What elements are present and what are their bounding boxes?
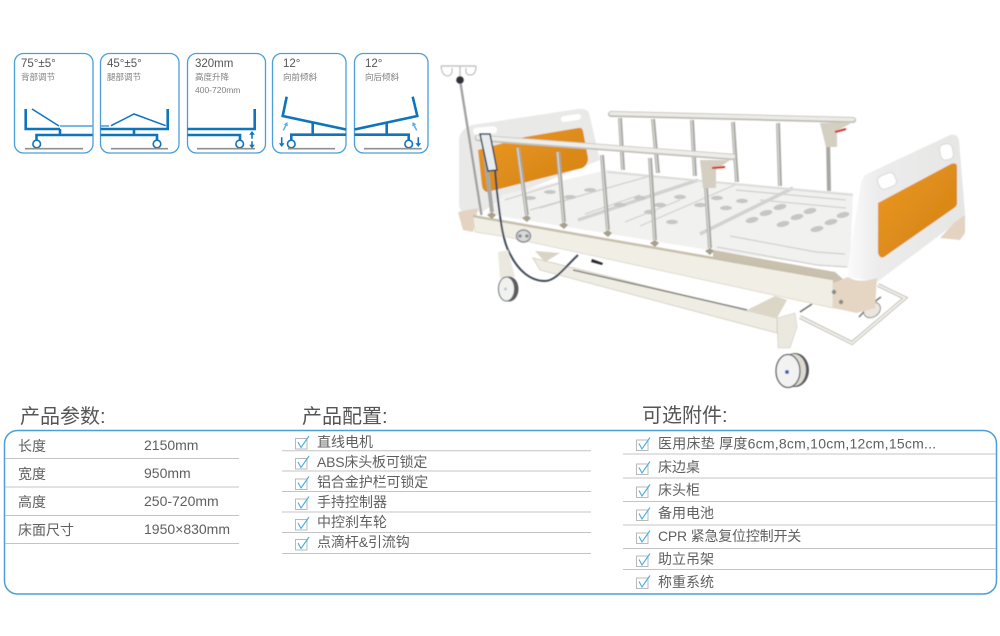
far headboard bbox=[458, 109, 600, 232]
icon card: leg adjustment 45°: 腿部调节 bbox=[107, 72, 142, 82]
mattress deck bbox=[487, 170, 853, 268]
item: ABS headboard: ABS床头板可锁定 bbox=[317, 454, 427, 470]
foot pedal frame bbox=[800, 285, 905, 343]
heading: product parameters: 产品参数: bbox=[20, 405, 106, 428]
icon card: tilt forward 12°: 向前倾斜 bbox=[283, 72, 318, 82]
icon card: leg adjustment 45°: 45°±5° bbox=[107, 58, 142, 70]
hand controller with cable bbox=[480, 134, 578, 281]
icon card: back adjustment 75°: 背部调节 bbox=[21, 72, 56, 82]
item: IV pole and drain hook: 点滴杆&引流钩 bbox=[317, 534, 410, 550]
accessories list bbox=[623, 436, 996, 590]
row: length: 2150mm bbox=[144, 437, 198, 453]
item: weighing system: 称重系统 bbox=[658, 574, 714, 590]
icon card: tilt backward 12°: 向后倾斜 bbox=[365, 72, 400, 82]
row: height: 250-720mm bbox=[144, 493, 219, 509]
rounded panel outline bbox=[4, 430, 996, 594]
item: overbed table: 床边桌 bbox=[658, 459, 700, 475]
item: mattress: 医用床垫 厚度6cm,8cm,10cm,12cm,15cm... bbox=[658, 436, 936, 452]
icon card: tilt forward 12°: 12° bbox=[283, 58, 300, 70]
row: width bbox=[18, 465, 191, 482]
row: width: 950mm bbox=[144, 465, 191, 481]
item: central brake: 中控刹车轮 bbox=[317, 514, 387, 530]
item: bedside cabinet: 床头柜 bbox=[658, 482, 700, 498]
near side rail bbox=[478, 138, 733, 255]
heading: product configuration: 产品配置: bbox=[302, 405, 388, 428]
row: deck size: 床面尺寸 bbox=[18, 522, 74, 538]
icon card: tilt forward 12° bbox=[272, 54, 346, 153]
near headboard bbox=[848, 135, 965, 282]
item: aluminium rail: 铝合金护栏可锁定 bbox=[317, 474, 428, 490]
item: overbed table bbox=[636, 459, 700, 475]
icon card: back adjustment 75° bbox=[14, 54, 93, 153]
parameters table bbox=[5, 437, 239, 544]
row: length: 长度 bbox=[18, 438, 46, 454]
icon card: back adjustment 75°: 75°±5° bbox=[21, 58, 56, 70]
icon card: tilt backward 12°: 12° bbox=[365, 58, 382, 70]
row: length bbox=[18, 437, 198, 454]
product image: electric hospital bed bbox=[441, 66, 965, 388]
heading: optional accessories: 可选附件: bbox=[642, 404, 728, 427]
icon card: leg adjustment 45° bbox=[100, 54, 179, 153]
icon card: height 320mm bbox=[188, 54, 266, 153]
row: deck size: 1950×830mm bbox=[144, 521, 230, 537]
row: deck size bbox=[18, 521, 230, 538]
item: bedside cabinet bbox=[636, 482, 700, 498]
item: hand controller: 手持控制器 bbox=[317, 494, 387, 510]
far side rail bbox=[611, 114, 853, 191]
near caster wheel bbox=[776, 313, 809, 388]
row: height: 高度 bbox=[18, 494, 46, 510]
deck mechanism strip bbox=[713, 250, 845, 283]
far caster wheel bbox=[498, 250, 518, 302]
item: linear motor: 直线电机 bbox=[317, 434, 373, 450]
lower base frame and mechanism bbox=[533, 251, 787, 333]
row: height bbox=[18, 493, 219, 510]
icon card: height 320mm: 400-720mm bbox=[195, 85, 240, 95]
configuration list bbox=[282, 434, 591, 554]
item: CPR switch: CPR 紧急复位控制开关 bbox=[658, 528, 801, 544]
icon card: height 320mm: 高度升降 bbox=[195, 72, 230, 82]
item: lifting pole: 助立吊架 bbox=[658, 551, 714, 567]
icon card: tilt backward 12° bbox=[354, 54, 428, 153]
icon card: height 320mm: 320mm bbox=[195, 58, 233, 70]
IV pole with hooks bbox=[441, 66, 482, 215]
row: width: 宽度 bbox=[18, 466, 46, 482]
tan corner block bbox=[832, 277, 877, 313]
item: backup battery: 备用电池 bbox=[658, 505, 714, 521]
side frame bbox=[473, 216, 833, 308]
